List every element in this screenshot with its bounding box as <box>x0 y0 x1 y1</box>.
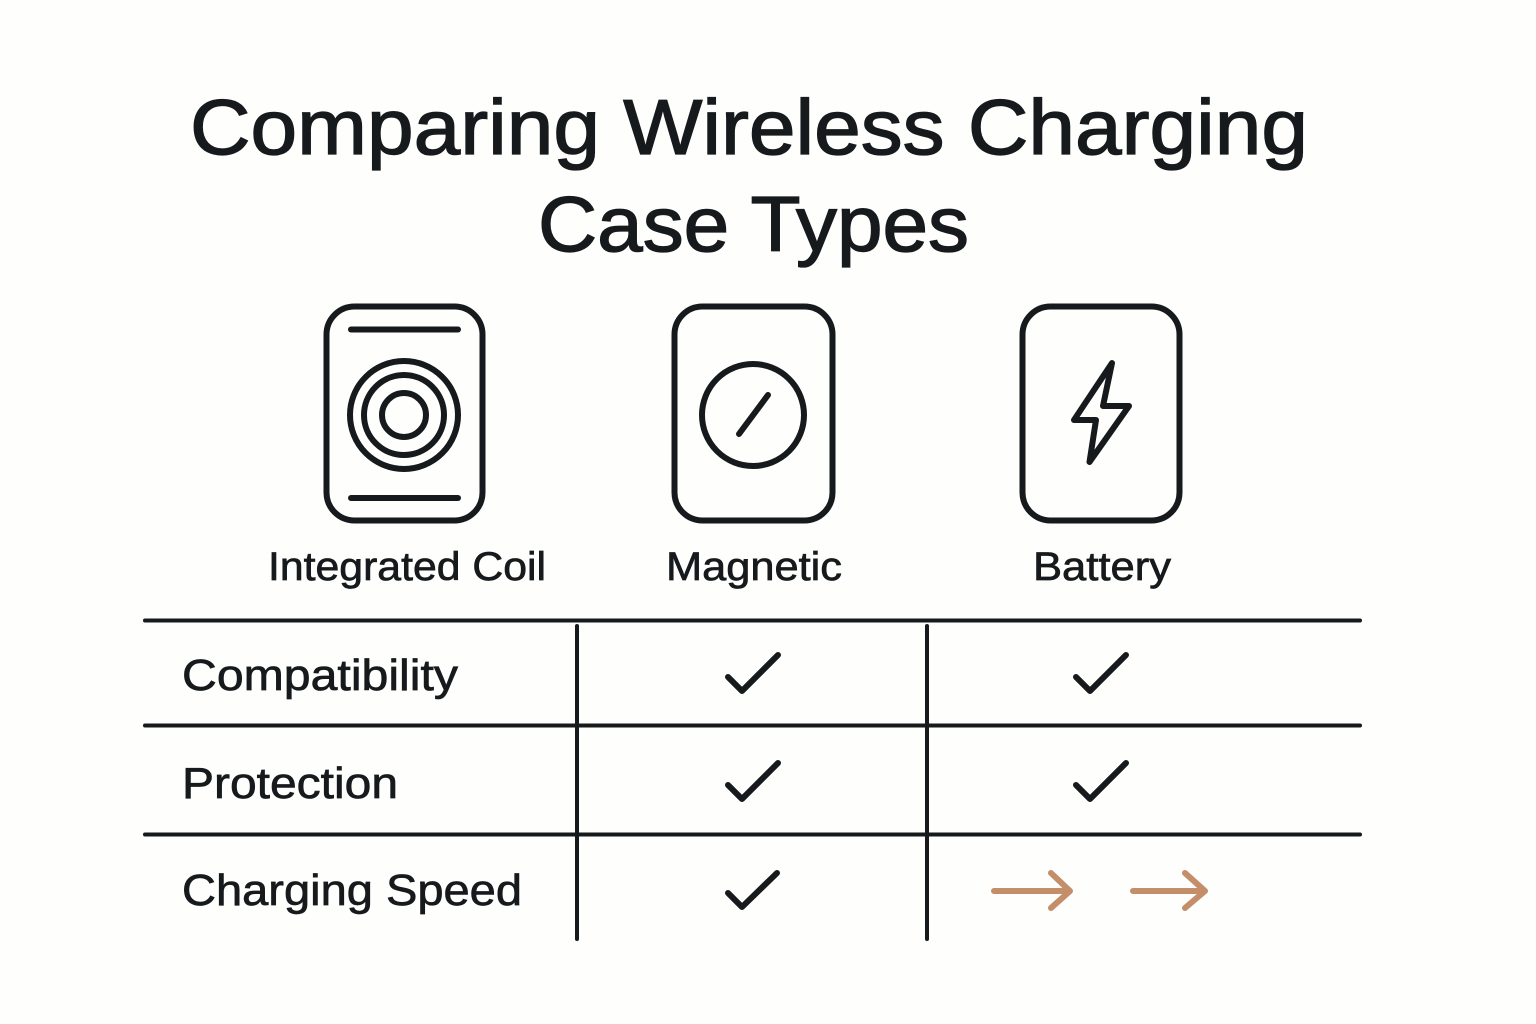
row label: Charging Speed: Charging Speed <box>182 866 522 915</box>
title <box>190 83 1308 268</box>
row label: Protection: Protection <box>182 759 398 808</box>
title: Case Types <box>538 180 969 268</box>
row label: Compatibility: Compatibility <box>182 651 458 700</box>
icon: battery case <box>1022 306 1180 520</box>
arrow: slow charging 1 <box>994 873 1070 908</box>
label: Battery: Battery <box>1033 545 1171 589</box>
check marks <box>728 655 1126 907</box>
icon: magnetic case <box>674 306 832 520</box>
comparison table grid <box>145 620 1360 939</box>
label: Integrated Coil: Integrated Coil <box>268 545 546 589</box>
label: Magnetic: Magnetic <box>666 545 842 589</box>
title: Comparing Wireless Charging <box>190 83 1308 171</box>
arrow: slow charging 2 <box>1133 873 1205 908</box>
icon: integrated coil case <box>326 306 482 520</box>
